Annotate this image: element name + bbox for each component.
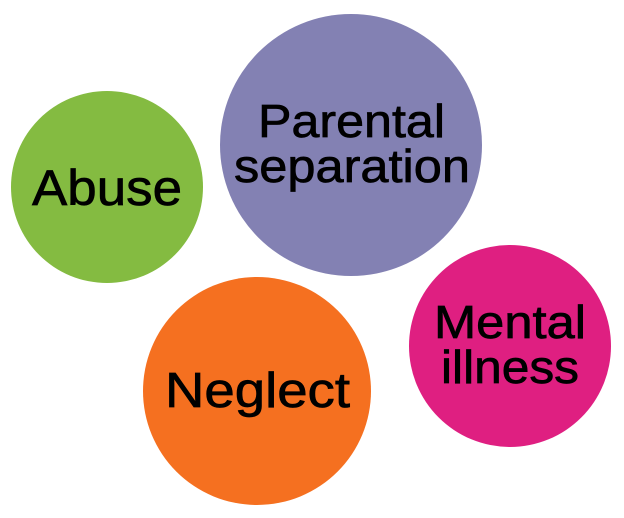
bubble: Parental separation: Parental	[258, 95, 445, 147]
bubble: Mental illness	[409, 245, 611, 447]
bubble: Neglect: Neglect	[165, 364, 350, 418]
bubble: Parental separation	[220, 14, 482, 276]
bubble: Mental illness: illness	[441, 341, 579, 393]
bubble: Abuse: Abuse	[32, 160, 182, 216]
bubble: Neglect	[143, 277, 371, 505]
bubble: Parental separation: separation	[234, 140, 470, 192]
bubble: Mental illness: Mental	[434, 296, 586, 348]
bubble: Abuse	[11, 91, 203, 283]
